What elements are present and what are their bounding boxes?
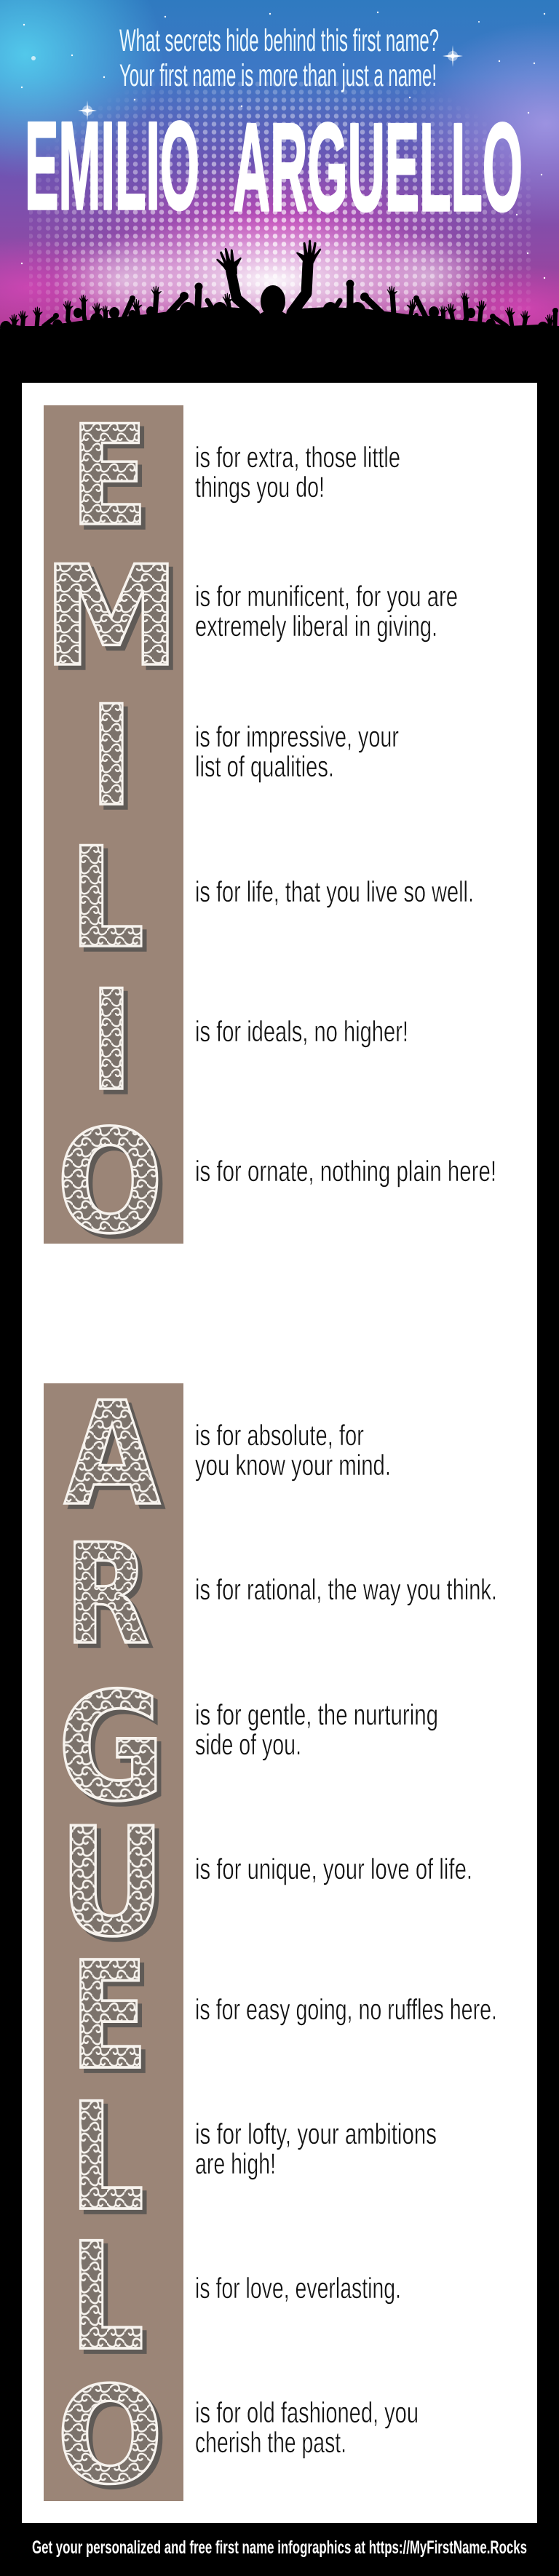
last name descriptions: is for gentle, the nurturing xyxy=(195,1699,438,1731)
brown column: last name xyxy=(44,1383,183,2501)
first name column xyxy=(42,397,183,1265)
letter R: R xyxy=(64,1514,150,1675)
subtitle xyxy=(119,23,439,93)
letter U: U xyxy=(59,1796,165,1970)
white content panel xyxy=(22,383,537,2523)
crowd silhouette xyxy=(0,239,559,383)
letter L: L xyxy=(70,817,144,979)
letter E: E xyxy=(70,1930,148,2102)
letter L: L xyxy=(70,2072,144,2244)
first name descriptions: is for impressive, your xyxy=(195,721,399,753)
letter I: I xyxy=(90,960,133,1121)
title: name: EMILIO xyxy=(25,96,199,236)
last name descriptions xyxy=(195,1420,497,2459)
first name descriptions: list of qualities. xyxy=(195,751,334,783)
letter I: I xyxy=(90,675,133,837)
first name descriptions: is for extra, those little xyxy=(195,442,400,474)
last name descriptions: side of you. xyxy=(195,1729,301,1761)
first name descriptions: is for munificent, for you are xyxy=(195,581,458,613)
brown column: first name xyxy=(44,405,183,1244)
banner background xyxy=(0,0,559,329)
letter G: G xyxy=(58,1661,165,1834)
last name descriptions: you know your mind. xyxy=(195,1450,391,1482)
last name descriptions: cherish the past. xyxy=(195,2427,346,2459)
first name descriptions: things you do! xyxy=(195,472,325,504)
last name descriptions: are high! xyxy=(195,2148,276,2180)
last name descriptions: is for lofty, your ambitions xyxy=(195,2118,437,2150)
letter E: E xyxy=(70,397,148,557)
letter O: O xyxy=(57,2358,163,2514)
last name descriptions: is for absolute, for xyxy=(195,1420,364,1452)
letter A: A xyxy=(64,1372,160,1538)
last name descriptions: is for old fashioned, you xyxy=(195,2397,419,2429)
sparkles xyxy=(21,12,545,279)
letter O: O xyxy=(57,1100,163,1265)
letter L: L xyxy=(70,2212,144,2384)
last name column xyxy=(44,1372,183,2514)
first name descriptions xyxy=(195,442,496,1188)
first name descriptions: is for ideals, no higher! xyxy=(195,1016,408,1048)
last name descriptions: is for love, everlasting. xyxy=(195,2273,401,2305)
letter M: M xyxy=(42,536,181,697)
first name descriptions: extremely liberal in giving. xyxy=(195,611,437,643)
